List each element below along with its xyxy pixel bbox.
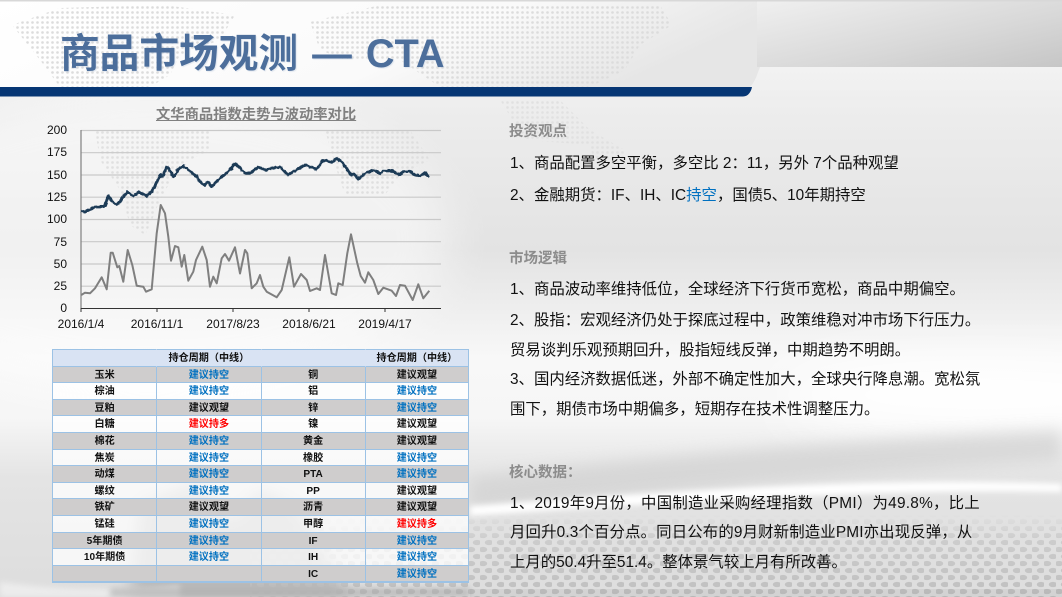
positions table [52, 349, 469, 583]
x axis labels: 2016/11/1 [131, 317, 184, 331]
x axis labels: 2016/1/4 [58, 317, 105, 331]
text: market logic 2: 贸易谈判乐观预期回升，股指短线反弹，中期趋势不明朗。 [510, 342, 910, 358]
heading: investment view: 投资观点 [509, 124, 567, 140]
positions table: PP [306, 486, 320, 497]
positions table: 动煤 [95, 469, 115, 480]
positions table: 黄金 [303, 436, 323, 447]
line chart: index vs volatility [47, 123, 441, 331]
text: core data: 月回升0.3个百分点。同日公布的9月财新制造业PMI亦出现反弹，从 [510, 524, 972, 541]
positions table: 建议持空 [397, 569, 437, 580]
positions table: 建议持空 [189, 453, 229, 464]
x axis labels: 2017/8/23 [206, 317, 260, 331]
positions table: 建议观望 [397, 419, 437, 430]
text: market logic 3 [510, 370, 980, 418]
positions table: 白糖 [95, 419, 115, 430]
text: market logic 2: 2、股指：宏观经济仍处于探底过程中，政策维稳对冲市场下行压力。 [510, 312, 980, 329]
positions table: 建议持空 [189, 386, 229, 397]
positions table: 棕油 [95, 386, 115, 397]
text: market logic 3: 3、国内经济数据低迷，外部不确定性加大，全球央行降息潮。宽松氛 [510, 371, 980, 388]
x axis labels: 2019/4/17 [358, 317, 412, 331]
text: core data [510, 494, 980, 571]
y axis labels: 100 [47, 212, 67, 226]
x axis labels [58, 317, 412, 331]
y axis labels [47, 123, 67, 315]
positions table: 锌 [308, 403, 318, 414]
heading: market logic: 市场逻辑 [509, 251, 567, 267]
volatility line [81, 205, 429, 300]
positions table: IF [309, 536, 318, 547]
positions table: 建议持空 [189, 436, 229, 447]
positions table: 铁矿 [95, 502, 115, 513]
positions table: 甲醇 [303, 519, 323, 530]
y axis labels: 150 [47, 168, 67, 182]
positions table: 建议观望 [397, 486, 437, 497]
text: core data: 上月的50.4升至51.4。整体景气较上月有所改善。 [510, 554, 847, 571]
positions table: 螺纹 [95, 486, 115, 497]
y axis labels: 200 [47, 123, 67, 137]
text: market logic 1: 1、商品波动率维持低位，全球经济下行货币宽松，商品中期偏空。 [510, 281, 965, 298]
positions table: IH [308, 552, 318, 563]
text: core data: 1、2019年9月份，中国制造业采购经理指数（PMI）为49.8%，比上 [510, 495, 980, 512]
y axis labels: 25 [54, 279, 67, 293]
positions table: 镍 [308, 419, 318, 430]
positions table: 橡胶 [303, 453, 323, 464]
y axis labels: 0 [60, 301, 67, 315]
positions table: 建议持多 [189, 419, 229, 430]
positions table: 建议持空 [189, 486, 229, 497]
positions table: 建议持空 [397, 453, 437, 464]
x axis labels: 2018/6/21 [282, 317, 336, 331]
positions table: IC [308, 569, 318, 580]
positions table: 建议持空 [189, 536, 229, 547]
positions table: 铜 [308, 370, 318, 380]
positions table: 棉花 [95, 436, 115, 447]
y axis labels: 175 [47, 145, 67, 159]
title: 商品市场观测 — CTA [60, 32, 444, 76]
chart title: 文华商品指数走势与波动率对比 [156, 107, 356, 123]
positions table: 沥青 [303, 502, 323, 513]
positions table: 建议持空 [189, 370, 229, 380]
text: market logic 2 [510, 312, 980, 358]
title divider bar [0, 87, 752, 96]
y axis labels: 75 [54, 235, 67, 249]
positions table: 建议持多 [397, 519, 437, 530]
text: market logic 3: 围下，期债市场中期偏多，短期存在技术性调整压力。 [510, 400, 879, 418]
positions table: 建议持空 [397, 469, 437, 480]
positions table: 建议观望 [397, 502, 437, 513]
y axis labels: 50 [54, 257, 67, 271]
y axis labels: 125 [47, 190, 67, 204]
positions table: 持仓周期（中线） [168, 353, 249, 364]
positions table: 建议持空 [397, 552, 437, 563]
positions table: 建议持空 [397, 536, 437, 547]
text: investment view 1: 1、商品配置多空平衡，多空比 2：11，另外 7个品种观望 [510, 155, 899, 172]
positions table: 5年期债 [87, 536, 123, 547]
positions table: 铝 [308, 386, 318, 397]
positions table: 焦炭 [95, 453, 115, 464]
positions table: 10年期债 [84, 552, 125, 563]
positions table: 豆粕 [95, 403, 115, 414]
positions table: 建议观望 [189, 403, 229, 414]
positions table: 建议观望 [397, 436, 437, 447]
positions table: 持仓周期（中线） [376, 353, 457, 364]
positions table: 建议持空 [397, 403, 437, 414]
text: investment view 2: 2、金融期货：IF、IH、IC持空，国债5、10年期持空 [510, 187, 866, 204]
positions table: 建议持空 [189, 469, 229, 480]
positions table: 锰硅 [95, 519, 115, 530]
positions table: 建议观望 [189, 502, 229, 513]
positions table: 玉米 [95, 370, 115, 380]
heading: core data: 核心数据： [509, 465, 582, 481]
positions table: 建议持空 [189, 552, 229, 563]
positions table: PTA [303, 469, 323, 480]
commodity index line [81, 158, 429, 212]
positions table: 建议持空 [397, 386, 437, 397]
positions table: 建议持空 [189, 519, 229, 530]
positions table: 建议观望 [397, 370, 437, 380]
